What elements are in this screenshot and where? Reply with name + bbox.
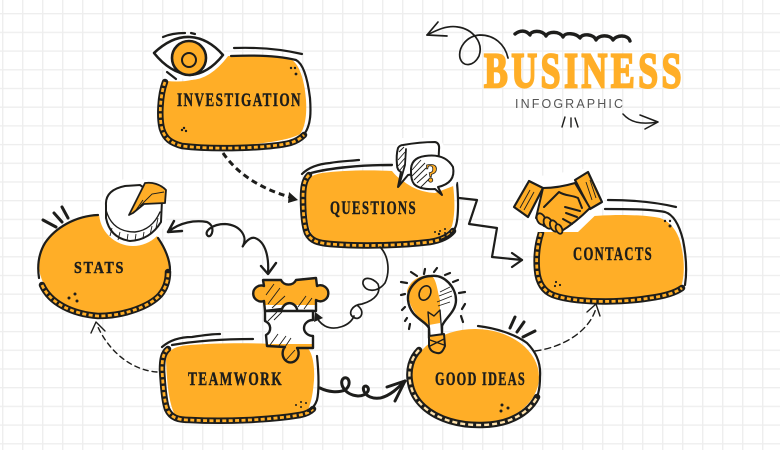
icon: speech bubbles: ? bbox=[425, 159, 438, 188]
icon: pie chart bbox=[99, 178, 167, 246]
title bbox=[427, 22, 685, 129]
hatched edge bbox=[160, 82, 304, 148]
arrow: investigation to questions bbox=[223, 153, 298, 203]
hands bbox=[536, 183, 590, 232]
outline bbox=[605, 200, 686, 285]
label: GOOD IDEAS bbox=[435, 369, 526, 390]
orange glow bbox=[407, 275, 440, 325]
lower piece bbox=[265, 311, 313, 362]
fill bbox=[39, 215, 169, 315]
fill bbox=[161, 56, 306, 147]
dots bbox=[554, 220, 672, 287]
icon: handshake bbox=[511, 168, 606, 235]
label: QUESTIONS bbox=[330, 198, 417, 219]
dots bbox=[68, 292, 78, 302]
label: STATS bbox=[74, 258, 125, 277]
dots bbox=[295, 401, 307, 408]
hatched edge bbox=[162, 349, 313, 421]
hatched edge bbox=[537, 233, 682, 301]
socket bbox=[429, 334, 445, 353]
subheading: INFOGRAPHIC: INFOGRAPHIC bbox=[515, 97, 623, 111]
curly arrow top left bbox=[427, 22, 508, 65]
rays bbox=[401, 268, 465, 329]
hatched edge bbox=[42, 272, 168, 316]
label: TEAMWORK bbox=[188, 369, 283, 390]
panel: teamwork bbox=[162, 334, 318, 421]
cuffs bbox=[514, 181, 543, 217]
ticks bbox=[43, 207, 68, 227]
label: CONTACTS bbox=[573, 244, 653, 265]
ticks bbox=[562, 117, 578, 127]
panel: questions bbox=[302, 160, 458, 245]
outline bbox=[311, 165, 392, 173]
panel: stats bbox=[38, 207, 170, 316]
ticks bbox=[510, 317, 535, 337]
panel: contacts bbox=[535, 200, 686, 301]
fill bbox=[166, 343, 314, 419]
arrow: questions to puzzle bbox=[314, 247, 388, 328]
outline bbox=[38, 215, 170, 278]
glass bbox=[408, 276, 456, 338]
icon: light bulb bbox=[401, 268, 465, 353]
squiggle bbox=[515, 31, 630, 41]
outline bbox=[162, 334, 318, 411]
outline bbox=[478, 326, 540, 397]
icon: eye bbox=[150, 33, 228, 80]
hatched edge bbox=[409, 350, 537, 425]
icon: puzzle bbox=[253, 278, 328, 362]
dots bbox=[434, 228, 446, 235]
arrow: good ideas to contacts bbox=[535, 304, 600, 351]
hatched edge bbox=[303, 175, 453, 245]
dots bbox=[181, 67, 297, 132]
arrow: stats to teamwork bbox=[168, 221, 276, 274]
arrow: teamwork to good ideas bbox=[320, 378, 405, 401]
icon: speech bubbles bbox=[392, 138, 462, 195]
upper piece bbox=[253, 278, 328, 311]
arrow: teamwork to stats bbox=[91, 322, 157, 372]
panel: investigation bbox=[160, 48, 310, 148]
arrow: questions to contacts bbox=[459, 198, 522, 267]
fill bbox=[411, 329, 539, 425]
fill bbox=[535, 215, 684, 301]
label: INVESTIGATION bbox=[177, 90, 302, 111]
dots bbox=[500, 404, 510, 412]
arrow right bbox=[623, 114, 658, 129]
heading: BUSINESS: BUSINESS bbox=[484, 42, 685, 98]
bulb outline bbox=[408, 276, 456, 338]
panel: good ideas bbox=[409, 317, 540, 425]
fill bbox=[306, 170, 454, 245]
outline bbox=[231, 56, 310, 133]
